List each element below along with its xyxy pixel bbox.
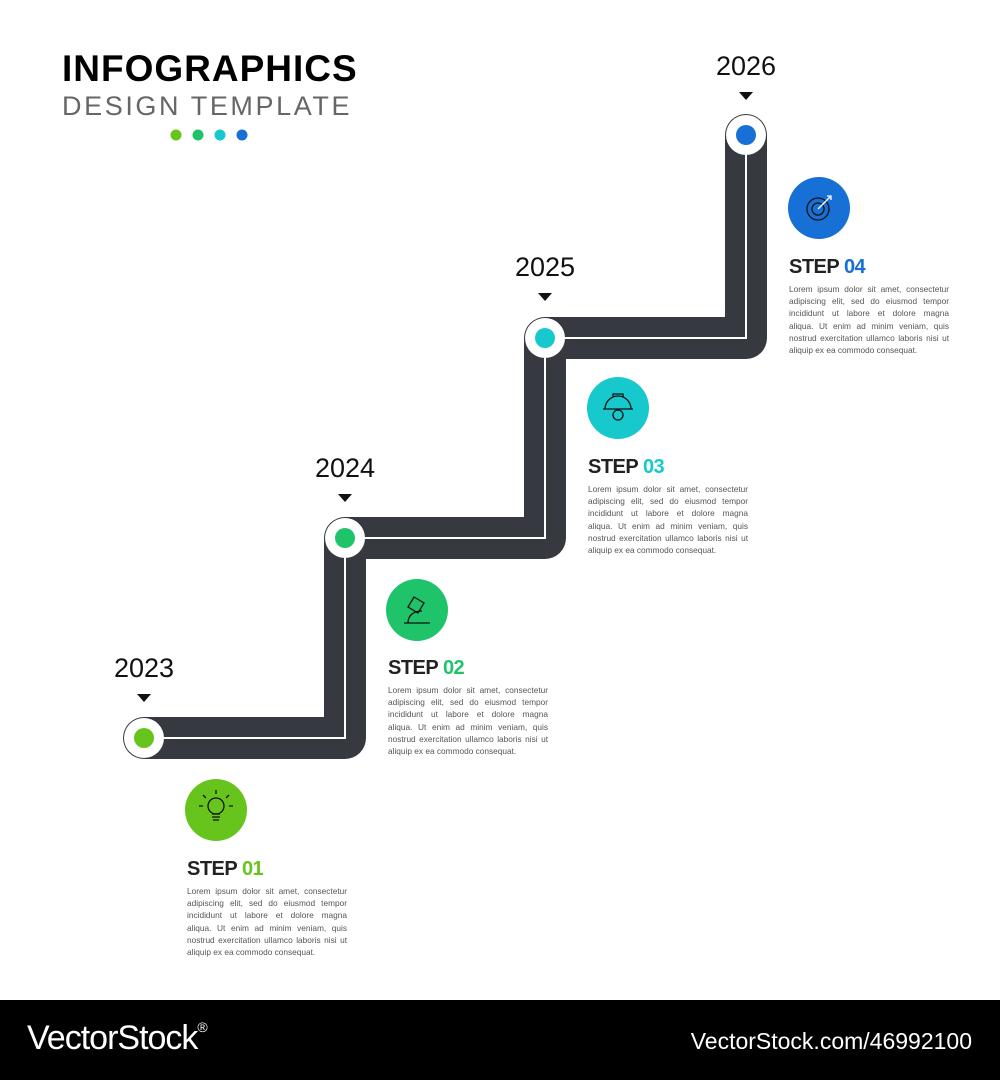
step 04 text: STEP 04 xyxy=(789,256,865,278)
step 01 text: nostrud exercitation ullamco laboris nisi ut xyxy=(187,935,347,945)
text: 2024 xyxy=(315,453,375,483)
step 03 text: incididunt ut labore et dolore magna xyxy=(588,508,748,518)
text: 2026 xyxy=(716,51,776,81)
step 03 text: adipiscing elit, sed do eiusmod tempor xyxy=(588,496,748,506)
year labels: 2023 xyxy=(114,653,174,683)
step 01 text: STEP 01 xyxy=(187,858,263,880)
step 02 text: adipiscing elit, sed do eiusmod tempor xyxy=(388,697,548,707)
step 02 text: STEP 02 xyxy=(388,657,464,679)
step 03 text: aliquip ex ea commodo consequat. xyxy=(588,545,716,555)
step 03 text: nostrud exercitation ullamco laboris nisi ut xyxy=(588,533,748,543)
step 01 text: aliqua. Ut enim ad minim veniam, quis xyxy=(187,923,347,933)
footer bar: VectorStock® xyxy=(27,1019,207,1057)
step 04 text: aliqua. Ut enim ad minim veniam, quis xyxy=(789,321,949,331)
icon: microscope xyxy=(386,579,448,641)
step 02 text: incididunt ut labore et dolore magna xyxy=(388,709,548,719)
step 02 text: aliqua. Ut enim ad minim veniam, quis xyxy=(388,722,548,732)
title: DESIGN TEMPLATE xyxy=(62,91,352,121)
icon: helmet gear xyxy=(587,377,649,439)
step 01 text: adipiscing elit, sed do eiusmod tempor xyxy=(187,898,347,908)
icon: lightbulb xyxy=(185,779,247,841)
title xyxy=(62,48,358,121)
step 03 text: STEP 03 xyxy=(588,456,664,478)
title: INFOGRAPHICS xyxy=(62,48,358,89)
footer bar: VectorStock.com/46992100 xyxy=(691,1028,972,1054)
footer bar xyxy=(0,1000,1000,1080)
step 02 text xyxy=(388,657,548,756)
step 01 text: Lorem ipsum dolor sit amet, consectetur xyxy=(187,886,347,896)
step 04 text: Lorem ipsum dolor sit amet, consectetur xyxy=(789,284,949,294)
step 02 text: Lorem ipsum dolor sit amet, consectetur xyxy=(388,685,548,695)
step 02 text: nostrud exercitation ullamco laboris nisi ut xyxy=(388,734,548,744)
icon: target xyxy=(788,177,850,239)
step 04 text: adipiscing elit, sed do eiusmod tempor xyxy=(789,296,949,306)
title dots xyxy=(170,130,248,140)
step 04 text: nostrud exercitation ullamco laboris nisi ut xyxy=(789,333,949,343)
text: 2025 xyxy=(515,252,575,282)
step 03 text: aliqua. Ut enim ad minim veniam, quis xyxy=(588,521,748,531)
step 01 text xyxy=(187,858,347,957)
step 02 text: aliquip ex ea commodo consequat. xyxy=(388,746,516,756)
step 01 text: aliquip ex ea commodo consequat. xyxy=(187,947,315,957)
step 04 text xyxy=(789,256,949,355)
step 04 text: aliquip ex ea commodo consequat. xyxy=(789,345,917,355)
step 04 text: incididunt ut labore et dolore magna xyxy=(789,308,949,318)
step 01 text: incididunt ut labore et dolore magna xyxy=(187,910,347,920)
step 03 text xyxy=(588,456,748,555)
step 03 text: Lorem ipsum dolor sit amet, consectetur xyxy=(588,484,748,494)
